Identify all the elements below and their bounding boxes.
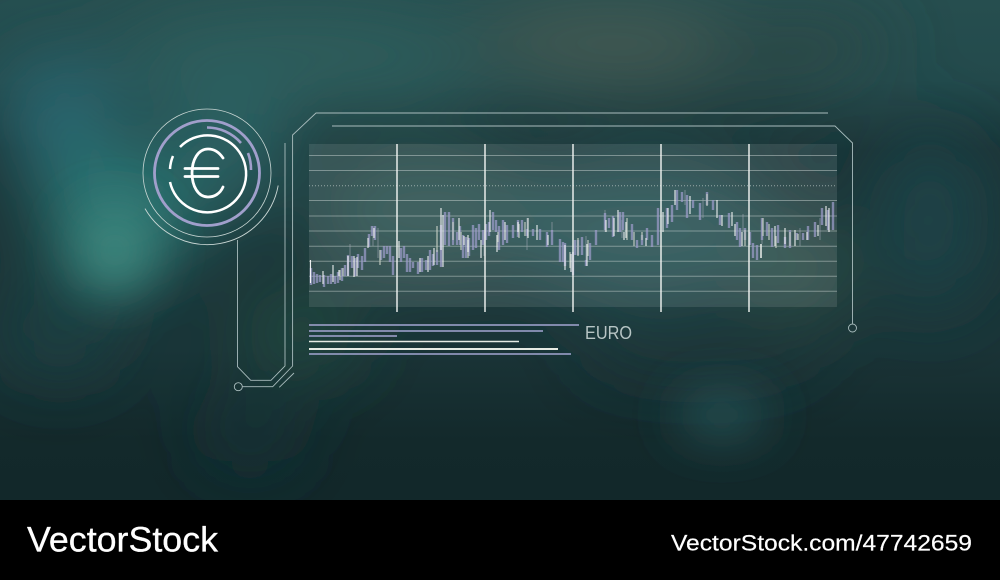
white broken circle (170, 135, 246, 212)
vertical dividers (397, 144, 749, 312)
right node (848, 324, 856, 332)
faint wicks (350, 190, 820, 267)
chart panel (309, 144, 837, 312)
euro coin icon (143, 109, 278, 245)
footer id: VectorStock.com/47742659 (671, 530, 972, 556)
footer wordmark: VectorStock (27, 520, 219, 560)
purple candles (311, 190, 833, 287)
outer thin ring (143, 109, 271, 237)
lower thin arc (145, 186, 278, 245)
legend lines (309, 325, 579, 354)
pale green candles (340, 194, 798, 280)
label: EURO: EURO (585, 323, 632, 343)
panel background (309, 144, 837, 307)
footer bar (0, 500, 1000, 580)
frame lines (234, 113, 857, 391)
dotted level (309, 185, 837, 187)
purple ring (154, 120, 260, 226)
white candles (310, 190, 829, 284)
right bracket (332, 126, 852, 324)
short diagonal (279, 373, 294, 387)
connector node (234, 383, 242, 391)
horizontal grid (309, 156, 837, 291)
candlesticks (310, 190, 833, 287)
euro symbol (185, 149, 223, 197)
purple inner arcs (207, 128, 241, 143)
inner left bracket (238, 143, 285, 380)
outer left and top bracket (242, 113, 828, 387)
